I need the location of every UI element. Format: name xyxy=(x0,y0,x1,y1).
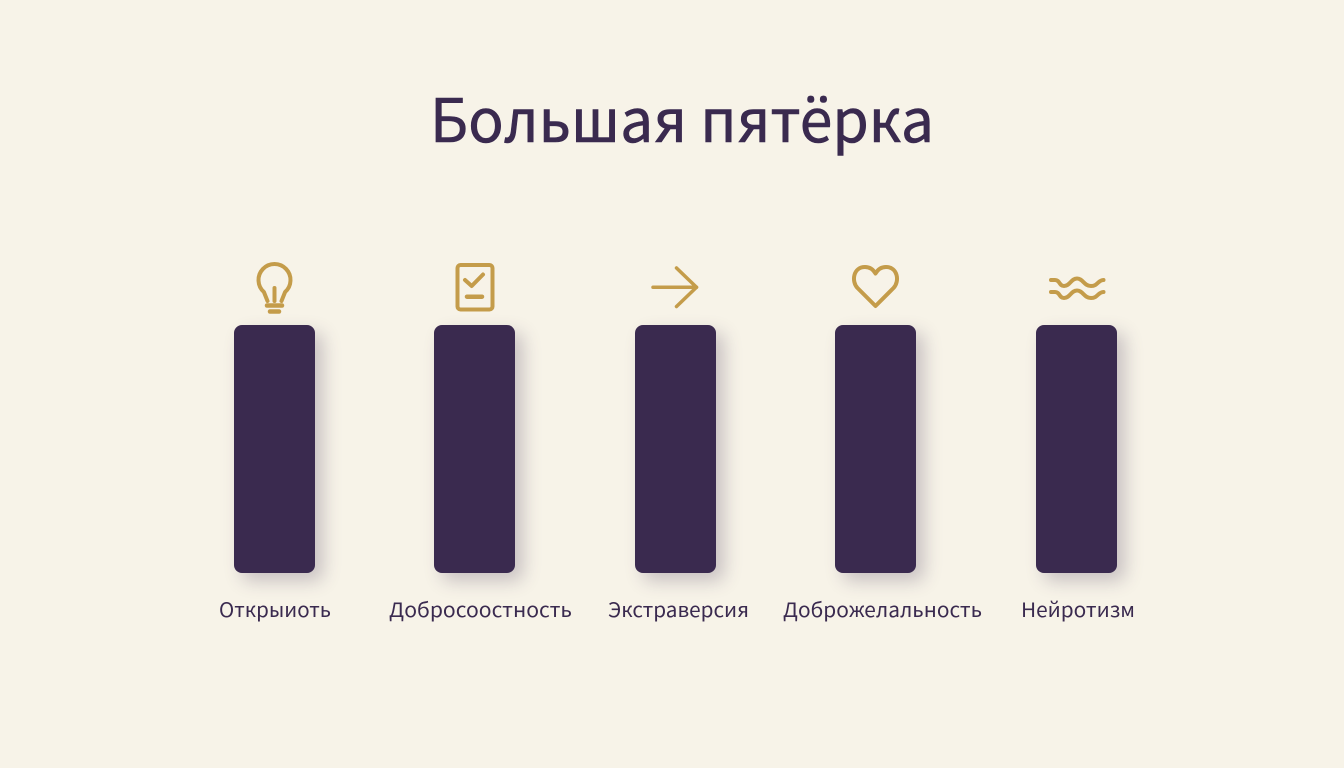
bar xyxy=(234,325,323,581)
column: Нейротизм xyxy=(1021,278,1135,623)
label: Экстраверсия xyxy=(608,594,749,623)
icon: checklist document xyxy=(458,265,492,310)
label: Открыиоть xyxy=(219,594,331,623)
column: Открытость xyxy=(219,264,331,623)
icon: waves xyxy=(1051,278,1104,298)
bar xyxy=(635,325,724,581)
icon: arrow xyxy=(653,268,696,306)
column: Доброжелательность xyxy=(783,267,982,623)
bar xyxy=(434,325,523,581)
icon: light bulb xyxy=(258,264,290,312)
title: Большая пятёрка xyxy=(430,73,934,160)
label: Добросоостность xyxy=(389,594,572,623)
label: Нейротизм xyxy=(1021,594,1135,623)
column: Добросовестность xyxy=(389,265,572,623)
icon: heart xyxy=(854,267,897,306)
bar xyxy=(1036,325,1125,581)
label: Доброжелальность xyxy=(783,594,982,623)
bar xyxy=(835,325,924,581)
column: Экстраверсия xyxy=(608,268,749,623)
